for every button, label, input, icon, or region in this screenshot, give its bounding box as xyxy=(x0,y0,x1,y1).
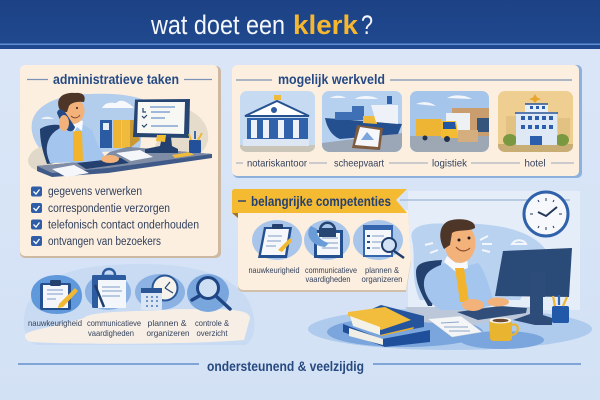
competency labels xyxy=(28,318,229,338)
desk xyxy=(37,147,212,177)
icon: wall clock xyxy=(524,192,568,236)
pen holder xyxy=(189,140,201,153)
card: hotel xyxy=(498,91,573,152)
competency labels: communicatieve xyxy=(305,265,357,275)
title: wat doet een xyxy=(150,10,285,40)
icon: controle en overzicht magnifier xyxy=(187,274,230,312)
phone xyxy=(57,110,75,131)
competency labels: organizeren xyxy=(362,274,403,284)
item: ontvangen van bezoekers: ontvangen van bezoekers xyxy=(48,236,161,248)
icon: communicatieve vaardigheden document xyxy=(85,269,131,310)
card labels: hotel xyxy=(524,158,546,170)
card labels: scheepvaart xyxy=(334,158,384,170)
competency labels: overzicht xyxy=(196,328,228,338)
header banner xyxy=(0,0,600,49)
card: scheepvaart xyxy=(322,91,402,152)
competency labels: plannen & xyxy=(148,318,187,328)
heading: mogelijk werkveld: mogelijk werkveld xyxy=(278,71,385,87)
hands xyxy=(462,299,484,311)
icon: plannen en organizeren xyxy=(353,220,404,260)
keyboard and papers xyxy=(77,158,129,169)
books xyxy=(343,324,430,347)
panel: competency icons left xyxy=(24,264,255,345)
competency labels: nauwkeurigheid xyxy=(28,318,82,328)
card labels xyxy=(236,158,574,170)
keyboard xyxy=(457,306,527,320)
item: correspondentie verzorgen: correspondentie verzorgen xyxy=(48,203,170,215)
coffee mug xyxy=(489,320,512,341)
pen holder xyxy=(552,306,569,323)
banner heading xyxy=(232,189,407,218)
card labels: notariskantoor xyxy=(247,158,307,170)
icon: plannen en organizeren calendar and clock xyxy=(135,274,185,310)
competency labels: communicatieve xyxy=(87,318,141,328)
competency labels: plannen & xyxy=(365,265,399,275)
heading: administratieve taken: administratieve taken xyxy=(53,71,179,87)
item: gegevens verwerken: gegevens verwerken xyxy=(48,186,142,198)
competency labels xyxy=(248,265,403,284)
icon: nauwkeurigheid clipboard xyxy=(31,275,82,314)
title xyxy=(150,10,373,40)
monitor xyxy=(495,248,572,297)
paper xyxy=(428,316,482,337)
icon: communicatieve vaardigheden xyxy=(304,220,350,260)
monitor xyxy=(133,99,190,138)
panel: belangrijke competenties xyxy=(232,189,580,310)
card labels: logistiek xyxy=(432,158,468,170)
illustration: clerk on the phone at desk xyxy=(28,93,212,177)
illustration: clerk at computer xyxy=(308,219,592,350)
competency labels: nauwkeurigheid xyxy=(248,265,300,275)
icon: nauwkeurigheid xyxy=(252,220,302,260)
footer tagline: ondersteunend & veelzijdig xyxy=(207,358,364,374)
competency labels: vaardigheden xyxy=(306,274,351,284)
competency labels: controle & xyxy=(195,318,229,328)
panel: administratieve taken xyxy=(20,65,221,258)
man xyxy=(424,263,495,310)
title: ? xyxy=(361,10,373,40)
binders xyxy=(100,120,112,148)
competency labels: vaardigheden xyxy=(88,328,134,338)
card: notariskantoor xyxy=(240,91,315,152)
banner heading: belangrijke competenties xyxy=(251,193,391,209)
chair xyxy=(416,260,442,306)
item: telefonisch contact onderhouden: telefonisch contact onderhouden xyxy=(48,220,199,232)
title: klerk xyxy=(293,10,359,40)
panel: mogelijk werkveld xyxy=(232,65,582,178)
card: logistiek xyxy=(410,91,489,152)
checklist xyxy=(31,186,199,248)
man xyxy=(47,124,106,163)
competency labels: organizeren xyxy=(146,328,190,338)
chair xyxy=(40,125,60,164)
